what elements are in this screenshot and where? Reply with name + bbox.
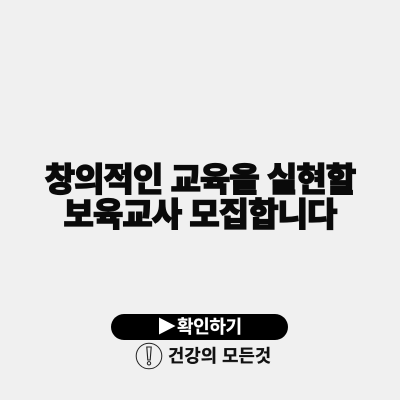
button label: 확인하기: [177, 317, 242, 337]
brand name: 건강의 모든것: [168, 346, 271, 366]
icon: exclamation circle: [136, 342, 162, 370]
button: confirm: [111, 314, 288, 340]
icon: play triangle: [159, 318, 176, 334]
title: [44, 161, 356, 233]
brand row: [136, 342, 271, 370]
title line 1: 창의적인 교육을 실현할: [45, 161, 355, 198]
title line 2: 보육교사 모집합니다: [64, 196, 336, 233]
